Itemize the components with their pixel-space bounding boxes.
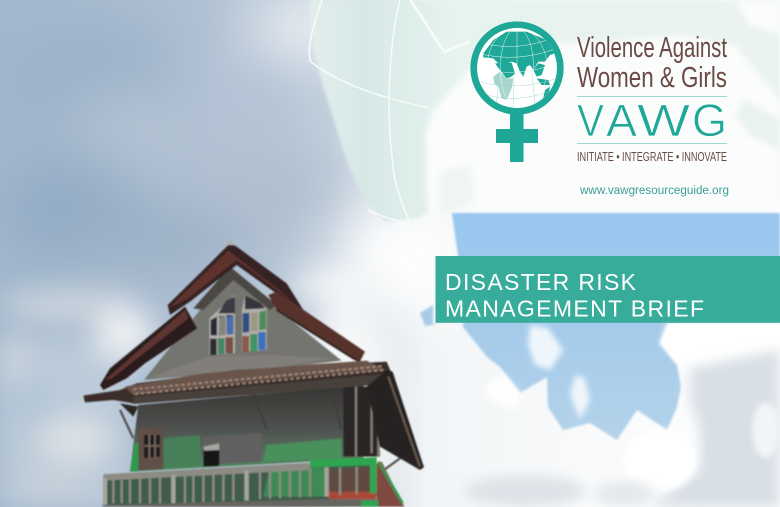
logo rule lines xyxy=(577,96,727,144)
house photograph xyxy=(83,239,424,507)
organisation name: Women & Girls xyxy=(577,62,727,94)
title banner xyxy=(436,256,780,323)
stained glass windows xyxy=(209,295,267,355)
upper wall of gable xyxy=(144,273,342,380)
VAWG letters: V xyxy=(577,95,604,146)
tagline: INITIATE • INTEGRATE • INNOVATE xyxy=(577,150,727,164)
upper roof xyxy=(100,239,365,390)
upper storey wall xyxy=(120,385,400,472)
icon: female symbol globe xyxy=(474,25,560,162)
porch eaves and tiled roof xyxy=(83,361,424,470)
VAWG letters: G xyxy=(692,95,727,146)
website link: www.vawgresourceguide.org xyxy=(579,185,729,197)
world map watermark panel xyxy=(309,0,780,225)
title text line one: DISASTER RISK xyxy=(445,269,637,295)
VAWG letters: W xyxy=(637,95,691,146)
VAWG letters xyxy=(577,95,727,146)
VAWG logo xyxy=(474,25,729,197)
title text line two: MANAGEMENT BRIEF xyxy=(445,296,704,322)
blue sky and clouds xyxy=(420,213,780,507)
balcony railing xyxy=(102,457,404,507)
VAWG letters: A xyxy=(606,95,637,146)
organisation name xyxy=(577,32,727,94)
